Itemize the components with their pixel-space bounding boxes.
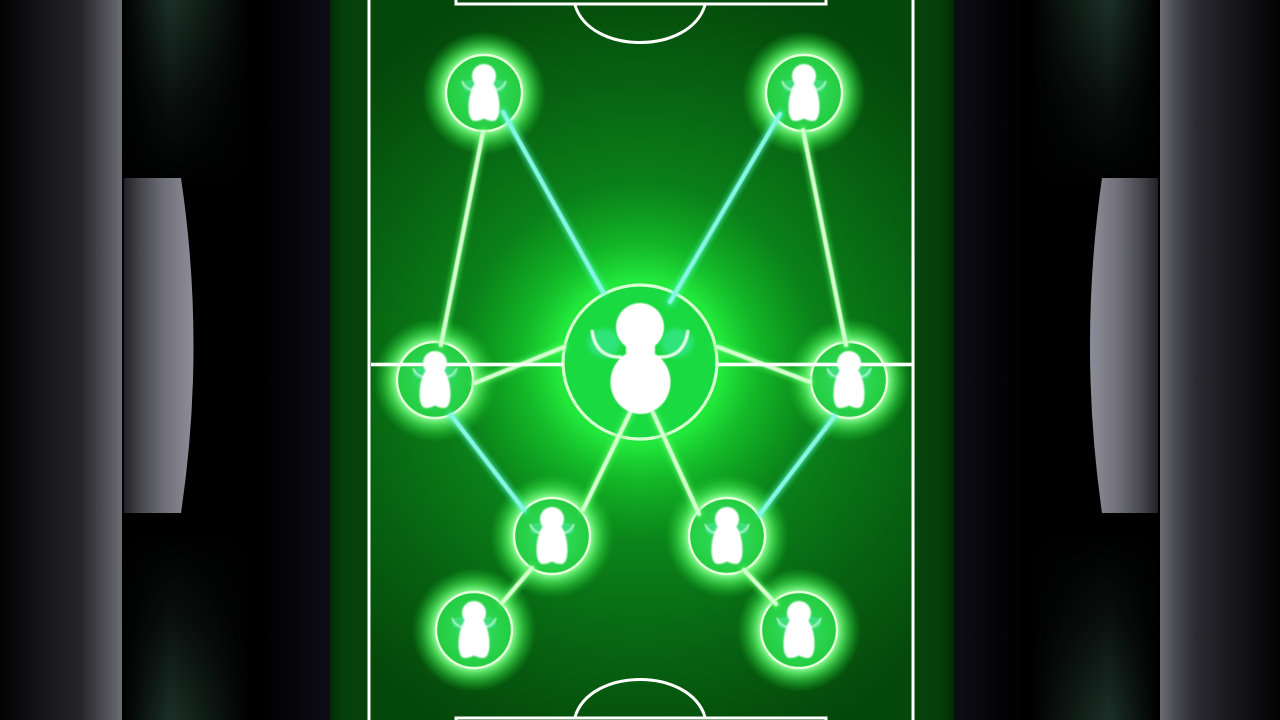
- connection lines: [441, 112, 846, 604]
- centre node disc: [563, 285, 717, 439]
- player: mid right: [827, 351, 871, 408]
- left wall: [0, 0, 122, 720]
- player: top right: [782, 64, 826, 121]
- left gate panel: [124, 178, 194, 513]
- pitch: [330, 0, 954, 720]
- player: lower left: [530, 507, 574, 564]
- player: bottom right: [777, 601, 821, 658]
- right stand: [954, 0, 1160, 720]
- cyan links glow: [451, 112, 834, 514]
- centre glow: [460, 182, 820, 542]
- green links glow: [441, 130, 846, 604]
- player: top left: [462, 64, 506, 121]
- green links: [441, 130, 846, 604]
- cyan links: [451, 112, 834, 514]
- player node discs: [373, 31, 911, 692]
- centre player figure: [592, 303, 688, 414]
- left stadium side: [0, 0, 330, 720]
- right stadium side: [954, 0, 1280, 720]
- player: lower right: [705, 507, 749, 564]
- player: bottom left: [452, 601, 496, 658]
- left stand: [122, 0, 330, 720]
- pitch boundary markings: [368, 0, 914, 720]
- player figures: [413, 64, 871, 658]
- halfway line: [371, 363, 912, 366]
- player: mid left: [413, 351, 457, 408]
- right gate panel: [1090, 178, 1158, 513]
- right wall: [1160, 0, 1280, 720]
